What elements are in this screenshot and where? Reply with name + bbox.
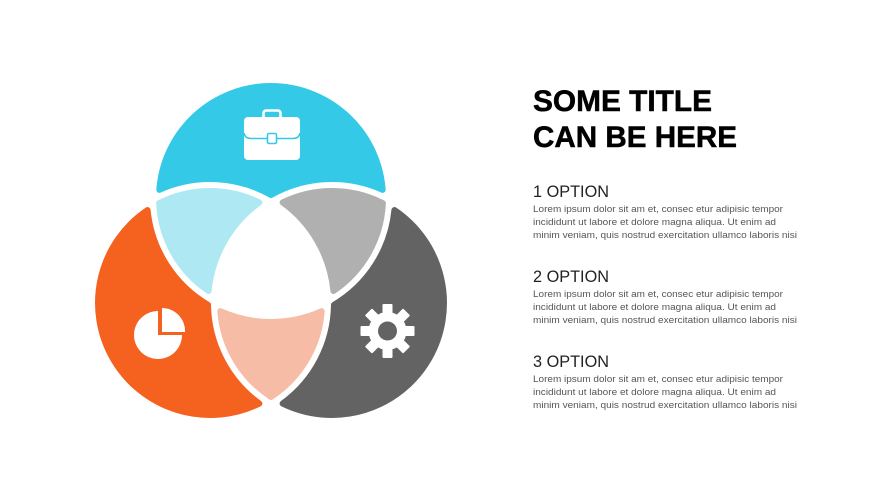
segment: top cyan (159, 86, 383, 195)
icon: briefcase (244, 110, 300, 160)
option 2: incididunt ut labore et dolore magna aliqua. Ut enim ad (533, 302, 776, 313)
option 1: Lorem ipsum dolor sit am et, consec etur adipisic tempor (533, 204, 784, 215)
overlap: light gray (283, 191, 383, 291)
icon: pie chart (134, 308, 185, 359)
option 2: 2 OPTION (533, 268, 609, 286)
option 3: Lorem ipsum dolor sit am et, consec etur adipisic tempor (533, 374, 784, 385)
option 2: minim veniam, quis nostrud exercitation ullamco laboris nisi (533, 315, 797, 326)
title (533, 85, 737, 154)
option 2 (533, 268, 797, 326)
option 3: minim veniam, quis nostrud exercitation ullamco laboris nisi (533, 400, 797, 411)
option 1: 1 OPTION (533, 183, 609, 201)
icon: gear (360, 304, 414, 358)
option 3: 3 OPTION (533, 353, 609, 371)
segment: left orange (98, 210, 259, 415)
option 1 (533, 183, 797, 241)
option 2: Lorem ipsum dolor sit am et, consec etur adipisic tempor (533, 289, 784, 300)
option 3: incididunt ut labore et dolore magna aliqua. Ut enim ad (533, 387, 776, 398)
option 1: minim veniam, quis nostrud exercitation ullamco laboris nisi (533, 230, 797, 241)
option 1: incididunt ut labore et dolore magna aliqua. Ut enim ad (533, 217, 776, 228)
segment: right gray (283, 210, 444, 415)
overlap: peach (220, 311, 322, 397)
overlap: light cyan (159, 191, 259, 291)
title: CAN BE HERE (533, 121, 737, 154)
venn diagram (98, 86, 444, 415)
title: SOME TITLE (533, 85, 712, 118)
option 3 (533, 353, 797, 411)
